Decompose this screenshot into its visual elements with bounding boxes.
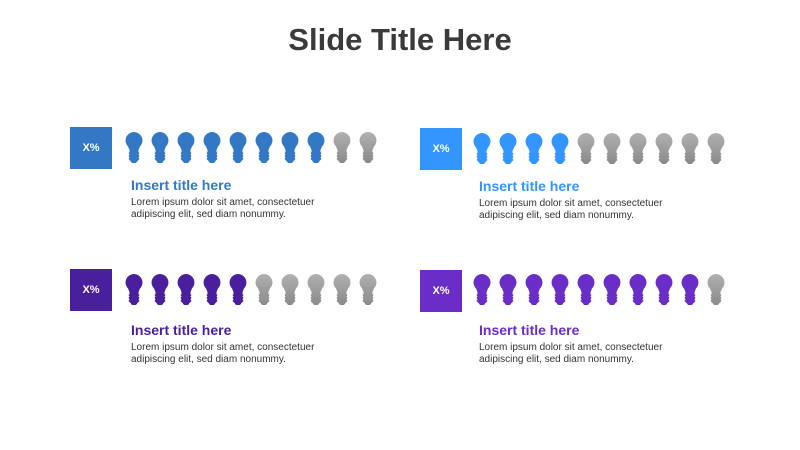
body text: adipiscing elit, sed diam nonummy. bbox=[479, 210, 634, 221]
bulb icons bbox=[474, 133, 724, 164]
panel: bottom-left bbox=[70, 269, 376, 365]
body text bbox=[131, 342, 314, 365]
percent box bbox=[70, 127, 112, 169]
body text bbox=[479, 198, 662, 221]
body text bbox=[131, 197, 314, 220]
bulb icons bbox=[126, 132, 376, 163]
body text: Lorem ipsum dolor sit amet, consectetuer bbox=[131, 197, 314, 208]
percent box bbox=[420, 128, 462, 170]
percent box: X% bbox=[432, 285, 450, 297]
bulb icons bbox=[126, 274, 376, 305]
bulb icons bbox=[474, 274, 724, 305]
percent box bbox=[420, 270, 462, 312]
panel: bottom-right bbox=[420, 270, 724, 365]
body text: adipiscing elit, sed diam nonummy. bbox=[131, 354, 286, 365]
heading: Insert title here bbox=[479, 178, 579, 194]
body text: adipiscing elit, sed diam nonummy. bbox=[131, 209, 286, 220]
body text: Lorem ipsum dolor sit amet, consectetuer bbox=[479, 198, 662, 209]
title: Slide Title Here bbox=[288, 22, 512, 57]
body text: Lorem ipsum dolor sit amet, consectetuer bbox=[131, 342, 314, 353]
percent box: X% bbox=[82, 284, 100, 296]
body text bbox=[479, 342, 662, 365]
panel: top-left bbox=[70, 127, 376, 220]
body text: adipiscing elit, sed diam nonummy. bbox=[479, 354, 634, 365]
panel: top-right bbox=[420, 128, 724, 221]
percent box: X% bbox=[82, 142, 100, 154]
body text: Lorem ipsum dolor sit amet, consectetuer bbox=[479, 342, 662, 353]
percent box bbox=[70, 269, 112, 311]
percent box: X% bbox=[432, 143, 450, 155]
heading: Insert title here bbox=[479, 322, 579, 338]
heading: Insert title here bbox=[131, 177, 231, 193]
heading: Insert title here bbox=[131, 322, 231, 338]
